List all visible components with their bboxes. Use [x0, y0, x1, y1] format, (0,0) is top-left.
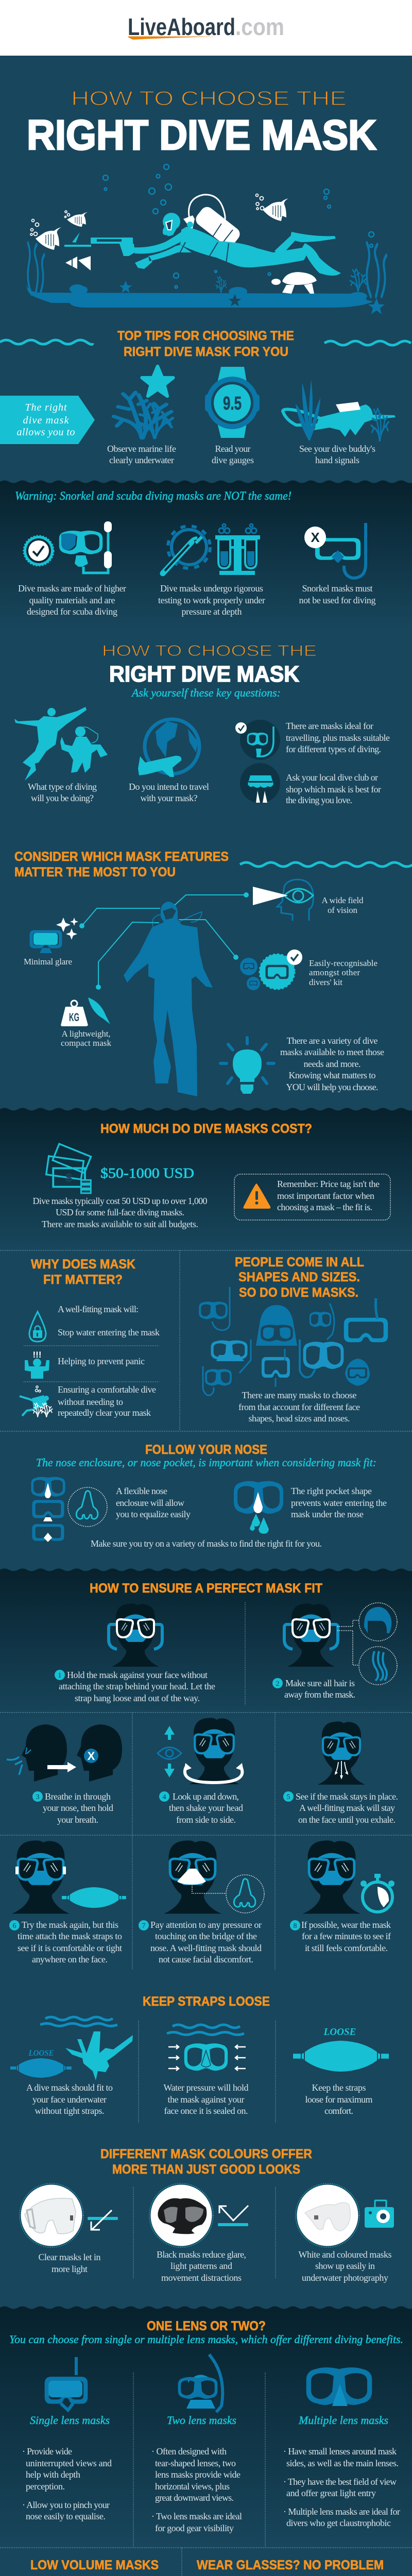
- section heading: how to choose: Ask yourself these key questions:: [131, 686, 281, 699]
- icon: snorkel mask with X: [304, 523, 366, 578]
- icon: globe and plane: [138, 719, 199, 777]
- speargun: [64, 232, 135, 256]
- text: tight straps: A dive mask should fit to: [26, 2082, 113, 2093]
- text: cost description: USD for some full-face diving masks.: [56, 1207, 184, 1217]
- heading wave: [240, 862, 412, 867]
- text: black masks: movement distractions: [161, 2273, 242, 2283]
- step 1 text: strap hang loose and out of the way.: [75, 1693, 200, 1703]
- text: water pressure: the mask against your: [168, 2094, 244, 2105]
- icon: panic diver: [25, 1350, 49, 1379]
- question labels: What type of diving: [28, 782, 97, 792]
- step 7 text: not cause facial discomfort.: [159, 1954, 253, 1964]
- icon: mask with water drops: [234, 1481, 283, 1534]
- icon: dive shop: [240, 763, 280, 803]
- step 2 text: 2: [276, 1680, 279, 1688]
- icon: three masks with noses: [31, 1477, 65, 1542]
- label: recognisable: divers' kit: [309, 977, 342, 987]
- heading: wear glasses: WEAR GLASSES? NO PROBLEM: [197, 2558, 384, 2572]
- hair connectors and circles: [337, 1603, 397, 1685]
- text: travelling masks: [286, 721, 390, 754]
- text: black masks: Black masks reduce glare,: [157, 2249, 246, 2260]
- heading: mask colours: MORE THAN JUST GOOD LOOKS: [112, 2162, 300, 2177]
- step 7 text: Pay attention to any pressure or: [150, 1920, 262, 1930]
- hero scene: diver underwater: [26, 164, 386, 314]
- column: single lens: perception.: [26, 2481, 65, 2492]
- text: travelling masks: There are masks ideal for: [286, 721, 373, 731]
- text: travelling masks: travelling, plus masks suitable: [286, 733, 390, 743]
- dotted dividers: steps: [0, 1602, 412, 1970]
- section: top tips heading: RIGHT DIVE MASK FOR YOU: [124, 345, 288, 359]
- text: cost description: There are masks available to suit all budgets.: [42, 1219, 198, 1229]
- diver mask: [163, 908, 176, 920]
- question labels: will you be doing?: [31, 793, 94, 803]
- text: flexible nose: enclosure will allow: [116, 1498, 184, 1508]
- section: top tips heading: [117, 329, 294, 359]
- icon: single lens mask: [45, 2357, 88, 2410]
- step 7 text: nose. A well-fitting mask should: [150, 1943, 262, 1953]
- column: two lens: · Two lens masks are ideal: [151, 2511, 242, 2521]
- text: black masks: light patterns and: [170, 2261, 232, 2271]
- label: lightweight: A lightweight,: [62, 1029, 110, 1039]
- icon: waves over diver: [40, 2017, 117, 2026]
- heading: perfect mask fit: HOW TO ENSURE A PERFECT MASK FIT: [90, 1581, 322, 1596]
- text: variety of masks: Knowing what matters to: [288, 1070, 376, 1080]
- text: variety of masks: There are a variety of dive: [286, 1036, 378, 1046]
- text: flexible nose: [116, 1486, 191, 1519]
- warning columns text: Dive masks undergo rigorous: [160, 583, 263, 594]
- warning columns text: pressure at depth: [181, 606, 242, 617]
- step 4 text: Look up and down,: [173, 1791, 239, 1802]
- icon: dive watch: [205, 367, 260, 438]
- icon: panic diver: !!!: [33, 1350, 41, 1360]
- icon: wide field of vision: [253, 879, 313, 921]
- tank and hose: [183, 195, 243, 249]
- icon: wrench, gear and test tubes: [163, 524, 260, 575]
- step 8 illustration: [303, 1840, 394, 1914]
- warning columns text: Dive masks are made of higher: [18, 583, 126, 594]
- icon: coral and starfish: [114, 366, 173, 438]
- striped fish: [65, 256, 91, 270]
- text: right pocket shape: The right pocket shape: [291, 1486, 372, 1496]
- dotted dividers: [133, 2187, 276, 2279]
- text: comfortable dive: [58, 1384, 156, 1418]
- text: flexible nose: A flexible nose: [116, 1486, 167, 1496]
- text: variety of masks: masks available to meet those: [280, 1047, 384, 1057]
- heading: why does fit matter: WHY DOES MASK: [31, 1257, 135, 1272]
- heading: consider features: MATTER THE MOST TO YOU: [14, 865, 176, 879]
- step 5 text: [283, 1791, 398, 1825]
- text: keep straps loose: comfort.: [324, 2106, 353, 2116]
- tip labels: clearly underwater: [109, 455, 174, 465]
- bubbles: [103, 164, 374, 289]
- column: multiple lens: divers who get claustrophobic: [286, 2518, 391, 2528]
- step 1 illustration: [109, 1603, 162, 1667]
- icon: loose strap large: [293, 2026, 389, 2072]
- text: keep straps loose: [305, 2082, 373, 2116]
- step 6 text: [9, 1920, 122, 1964]
- warning columns text: designed for scuba diving: [27, 606, 117, 617]
- column: multiple lens: · Have small lenses around mask: [283, 2446, 397, 2456]
- icon: waves and pressure mask: [167, 2025, 246, 2071]
- step 7 text: 7: [142, 1922, 145, 1930]
- icon: mask in dark circle: [235, 720, 280, 760]
- step 5 illustration: exhale: [318, 1721, 365, 1785]
- callout: price tag reminder: most important factor when: [277, 1191, 374, 1201]
- icon: recognisable masks badge: [240, 950, 302, 990]
- step 7 illustration: [164, 1840, 264, 1914]
- heading: mask colours: DIFFERENT MASK COLOURS OFFER: [100, 2147, 312, 2161]
- tip labels: [107, 444, 375, 465]
- text: variety of masks: [280, 1036, 384, 1092]
- icon: nose in dotted circle: [68, 1487, 107, 1527]
- text: ask local dive club: Ask your local dive club or: [286, 772, 378, 783]
- top white header: [0, 0, 412, 56]
- step 5 text: See if the mask stays in place.: [296, 1791, 398, 1802]
- column: two lens: for good gear visibility: [155, 2523, 234, 2533]
- column: two lens: Two lens masks: [167, 2414, 236, 2427]
- text: ask local dive club: [286, 772, 381, 805]
- dark band: cost: [0, 1108, 412, 1250]
- text: well-fitting intro: A well-fitting mask will:: [58, 1304, 139, 1314]
- text: water pressure: [164, 2082, 248, 2116]
- step 1 text: [55, 1670, 215, 1703]
- heading: people come in all shapes: SO DO DIVE MASKS.: [239, 1285, 358, 1300]
- icon: cash: [46, 1144, 91, 1193]
- column: multiple lens: Multiple lens masks: [298, 2414, 388, 2427]
- text: variety of masks: needs and more.: [304, 1059, 360, 1069]
- step 3 text: 3: [36, 1793, 39, 1801]
- column: single lens: Single lens masks: [30, 2414, 110, 2427]
- warning columns text: quality materials and are: [29, 595, 115, 605]
- step 1 text: Hold the mask against your face without: [67, 1670, 208, 1680]
- text: comfortable dive: without needing to: [58, 1397, 123, 1407]
- icon: multiple lens mask: [306, 2367, 372, 2406]
- text: comfortable dive: repeatedly clear your mask: [58, 1408, 151, 1418]
- text: comfortable dive: Ensuring a comfortable dive: [58, 1384, 156, 1395]
- column: single lens: nose easily to equalise.: [26, 2511, 106, 2521]
- mask collage: [199, 1287, 388, 1395]
- text: cost description: [33, 1196, 207, 1229]
- diver body: [133, 213, 341, 276]
- callout arrow: the right dive mask: [0, 396, 95, 444]
- diver mask: [162, 221, 229, 268]
- callout: price tag reminder: choosing a mask – the fit is.: [277, 1202, 372, 1212]
- step 3 text: [32, 1791, 113, 1825]
- text: white masks: underwater photography: [302, 2273, 388, 2283]
- tip labels: Observe marine life: [107, 444, 176, 454]
- callout arrow: the right dive mask: dive mask: [23, 415, 70, 426]
- turtle: [271, 272, 317, 294]
- dotted dividers: fit section: [0, 1250, 412, 1431]
- step 7 text: touching on the bridge of the: [155, 1931, 257, 1941]
- question labels: with your mask?: [140, 793, 198, 803]
- step 3 illustration: breathing profiles: X: [88, 1750, 95, 1762]
- text: ask local dive club: the diving you love.: [286, 795, 352, 805]
- text: variety of masks: YOU will help you choose.: [286, 1082, 378, 1092]
- text: many masks: [238, 1390, 360, 1423]
- step 1 text: 1: [58, 1672, 62, 1680]
- callout: price tag reminder: Remember: Price tag isn't the: [277, 1179, 380, 1189]
- title: RIGHT DIVE MASK: [27, 112, 376, 159]
- step 8 text: for a few minutes to see if: [302, 1931, 391, 1941]
- heading: keep straps loose: KEEP STRAPS LOOSE: [143, 1994, 270, 2009]
- tip labels: dive gauges: [212, 455, 254, 465]
- central diver silhouette: [124, 902, 213, 1096]
- heading: one lens or two: [9, 2319, 403, 2346]
- heading: consider features: [14, 850, 229, 879]
- text: cost description: Dive masks typically cost 50 USD up to over 1,000: [33, 1196, 207, 1206]
- section heading: how to choose: HOW TO CHOOSE THE: [102, 642, 317, 659]
- label: wide field: A wide field: [321, 895, 364, 905]
- step 4 text: from side to side.: [176, 1815, 236, 1825]
- seabed details: [28, 243, 386, 314]
- text: many masks: from that account for different face: [238, 1402, 360, 1412]
- warning columns text: not be used for diving: [299, 595, 376, 605]
- icon: diver in kelp: [283, 380, 396, 440]
- icon: snorkel mask with X: X: [311, 530, 320, 545]
- seabed: [26, 283, 373, 308]
- step 8 text: it still feels comfortable.: [305, 1943, 388, 1953]
- column: multiple lens: · Multiple lens masks are ideal for: [283, 2506, 400, 2517]
- text: tight straps: your face underwater: [32, 2094, 107, 2105]
- section heading: how to choose: [102, 642, 317, 699]
- dotted dividers: [139, 2021, 276, 2123]
- icon: loose strap: LOOSE: [28, 2049, 54, 2058]
- label: recognisable: Easily-recognisable: [309, 958, 377, 968]
- dark band: warning: [0, 480, 412, 629]
- callout: price tag reminder: [234, 1174, 390, 1220]
- step 6 illustration: [12, 1840, 126, 1914]
- text: many masks: There are many masks to choose: [242, 1390, 356, 1400]
- label: lightweight: [61, 1029, 111, 1048]
- column: single lens: help with depth: [26, 2469, 80, 2480]
- step 2 text: [272, 1678, 355, 1700]
- icon: water drop with lock: [29, 1312, 46, 1342]
- icon: upside down diver: [65, 2031, 133, 2080]
- text: water pressure: face once it is sealed on.: [164, 2106, 248, 2116]
- tip labels: hand signals: [315, 455, 359, 465]
- photo: clear mask: [20, 2183, 83, 2247]
- icon: minimal glare: [30, 918, 78, 953]
- price: $50-1000 USD: [100, 1165, 194, 1181]
- text: clear masks: Clear masks let in: [38, 2252, 101, 2262]
- step 3 text: Breathe in through: [45, 1791, 111, 1802]
- step 8 text: 8: [294, 1922, 297, 1930]
- label: wide field: [321, 895, 364, 915]
- section: top tips heading: TOP TIPS FOR CHOOSING THE: [117, 329, 294, 343]
- heading: one lens or two: ONE LENS OR TWO?: [147, 2319, 266, 2333]
- text: try on a variety: Make sure you try on a variety of masks to find the right fit for you.: [91, 1538, 322, 1549]
- column: single lens: · Provide wide: [22, 2446, 72, 2456]
- callout arrow: the right dive mask: allows you to: [16, 427, 75, 438]
- fish: [36, 198, 288, 250]
- step 6 text: 6: [12, 1922, 16, 1930]
- warning heading: Warning: Snorkel and scuba diving masks are NOT the same!: [15, 489, 291, 502]
- text: water pressure: Water pressure will hold: [164, 2082, 248, 2093]
- tip labels: See your dive buddy's: [299, 444, 375, 454]
- logo: .com: [235, 13, 284, 40]
- dark band: lenses: [0, 2306, 412, 2548]
- heading: people come in all shapes: SHAPES AND SIZES.: [238, 1270, 360, 1284]
- warning columns text: [18, 583, 376, 617]
- photo: black mask: [149, 2183, 213, 2247]
- step 3 text: your breath.: [57, 1815, 98, 1825]
- step 4 illustration: look up and down: [158, 1718, 244, 1784]
- column: multiple lens: and offer great light entry: [286, 2488, 376, 2498]
- icon: kilogram weight and feather: KG: [69, 1011, 79, 1024]
- step 5 text: A well-fitting mask will stay: [299, 1803, 395, 1813]
- column: multiple lens: sides, as well as the main lenses.: [286, 2458, 399, 2468]
- white bubbles: [30, 194, 264, 236]
- text: flexible nose: you to equalize easily: [116, 1509, 191, 1519]
- column: single lens: · Allow you to pinch your: [22, 2500, 110, 2510]
- heading: one lens or two: You can choose from single or multiple lens masks, which offer different diving benefits.: [9, 2333, 403, 2346]
- column: two lens: [151, 2414, 242, 2533]
- heading: people come in all shapes: PEOPLE COME IN ALL: [235, 1255, 364, 1269]
- heading: why does fit matter: [31, 1257, 135, 1287]
- step 1 text: attaching the strap behind your head. Let the: [59, 1681, 215, 1691]
- dark band: perfect fit: [0, 1568, 412, 1721]
- step 4 text: [159, 1791, 243, 1825]
- icon: light bulb: [220, 1038, 274, 1094]
- diver gear outlines: [152, 912, 202, 927]
- step 4 text: then shake your head: [169, 1803, 243, 1813]
- heading: why does fit matter: FIT MATTER?: [43, 1273, 123, 1287]
- step 6 text: see if it is comfortable or tight: [18, 1943, 122, 1953]
- icon: two lens mask: [178, 2354, 222, 2412]
- column: multiple lens: · They have the best field of view: [283, 2477, 397, 2487]
- arrows: more light: [88, 2210, 118, 2230]
- text: ask local dive club: shop which mask is best for: [286, 784, 381, 794]
- icon: two divers silhouettes: [14, 707, 108, 781]
- heading: follow your nose: [36, 1443, 376, 1469]
- step 4 text: 4: [163, 1793, 166, 1801]
- heading: low volume masks: LOW VOLUME MASKS: [30, 2558, 159, 2572]
- warning columns text: Snorkel masks must: [302, 583, 373, 594]
- step 5 text: 5: [286, 1793, 290, 1801]
- column: two lens: lens masks provide wide: [155, 2469, 241, 2480]
- text: clear masks: [38, 2252, 101, 2274]
- connector lines: [79, 892, 249, 990]
- step 8 text: If possible, wear the mask: [301, 1920, 391, 1930]
- text: keep straps loose: loose for maximum: [305, 2094, 373, 2105]
- question labels: [28, 782, 209, 803]
- column: two lens: · Often designed with: [151, 2446, 227, 2456]
- column: single lens: uninterrupted views and: [26, 2458, 112, 2468]
- section heading: how to choose: RIGHT DIVE MASK: [109, 662, 299, 687]
- text: keep straps loose: Keep the straps: [312, 2082, 366, 2093]
- heading: mask colours: [100, 2147, 312, 2177]
- photo: white mask: [296, 2183, 359, 2247]
- heading: people come in all shapes: [235, 1255, 364, 1300]
- tip labels: Read your: [215, 444, 250, 454]
- text: clear masks: more light: [52, 2264, 88, 2274]
- text: prevent panic: Helping to prevent panic: [58, 1356, 145, 1366]
- column: single lens: [22, 2414, 112, 2521]
- icon: kilogram weight and feather: [61, 997, 110, 1026]
- step 2 text: Make sure all hair is: [285, 1678, 355, 1688]
- column: multiple lens: [283, 2414, 400, 2528]
- heading: follow your nose: FOLLOW YOUR NOSE: [145, 1443, 267, 1457]
- step 2 illustration: [284, 1603, 338, 1667]
- label: minimal glare: Minimal glare: [24, 957, 72, 967]
- text: right pocket shape: [291, 1486, 387, 1519]
- column: two lens: great downward views.: [155, 2493, 234, 2503]
- text: tight straps: [26, 2082, 113, 2116]
- title: [27, 88, 376, 159]
- heading: follow your nose: The nose enclosure, or nose pocket, is important when considering mask fit:: [36, 1456, 376, 1469]
- text: white masks: White and coloured masks: [299, 2249, 391, 2260]
- column: two lens: tear-shaped lenses, two: [155, 2458, 236, 2468]
- icon: dive watch: 9.5: [223, 393, 242, 414]
- text: black masks: [157, 2249, 246, 2283]
- text: white masks: show up easily in: [315, 2261, 375, 2271]
- step 3 text: your nose, then hold: [43, 1803, 113, 1813]
- step 6 text: Try the mask again, but this: [22, 1920, 118, 1930]
- step 7 text: [139, 1920, 262, 1964]
- column: two lens: horizontal views, plus: [155, 2481, 230, 2492]
- step 6 text: time attach the mask straps to: [18, 1931, 122, 1941]
- arrows: reduce glare: [218, 2206, 248, 2226]
- text: white masks: [299, 2249, 391, 2283]
- question labels: Do you intend to travel: [129, 782, 209, 792]
- text: many masks: shapes, head sizes and noses.: [248, 1413, 350, 1423]
- warning columns text: testing to work properly under: [158, 595, 265, 605]
- logo: LiveAboard: [128, 13, 235, 40]
- text: stop water: Stop water entering the mask: [58, 1327, 160, 1337]
- heading: cost: HOW MUCH DO DIVE MASKS COST?: [100, 1122, 312, 1136]
- title: HOW TO CHOOSE THE: [71, 88, 347, 110]
- icon: quality badge and mask: [24, 521, 112, 573]
- label: recognisable: [309, 958, 377, 987]
- step 2 text: away from the mask.: [284, 1689, 355, 1700]
- label: recognisable: amongst other: [309, 968, 360, 977]
- icon: small diver: [20, 1386, 53, 1417]
- text: right pocket shape: mask under the nose: [291, 1509, 364, 1519]
- heading: consider features: CONSIDER WHICH MASK FEATURES: [14, 850, 229, 864]
- callout arrow: the right dive mask: The right: [25, 402, 67, 413]
- label: wide field: of vision: [328, 905, 357, 915]
- label: lightweight: compact mask: [61, 1038, 111, 1048]
- icon: loose strap: [10, 2049, 72, 2078]
- dotted dividers: [0, 2372, 412, 2576]
- text: right pocket shape: prevents water entering the: [291, 1498, 387, 1508]
- heading waves: [0, 340, 411, 345]
- step 8 text: [290, 1920, 391, 1953]
- step 3 illustration: breathing profiles: [7, 1724, 122, 1782]
- icon: camera: [365, 2200, 394, 2228]
- text: travelling masks: for different types of diving.: [286, 744, 381, 754]
- icon: loose strap large: LOOSE: [323, 2026, 356, 2038]
- step 6 text: anywhere on the face.: [32, 1954, 108, 1964]
- step 5 text: on the face until you exhale.: [298, 1815, 396, 1825]
- text: tight straps: without tight straps.: [35, 2106, 104, 2116]
